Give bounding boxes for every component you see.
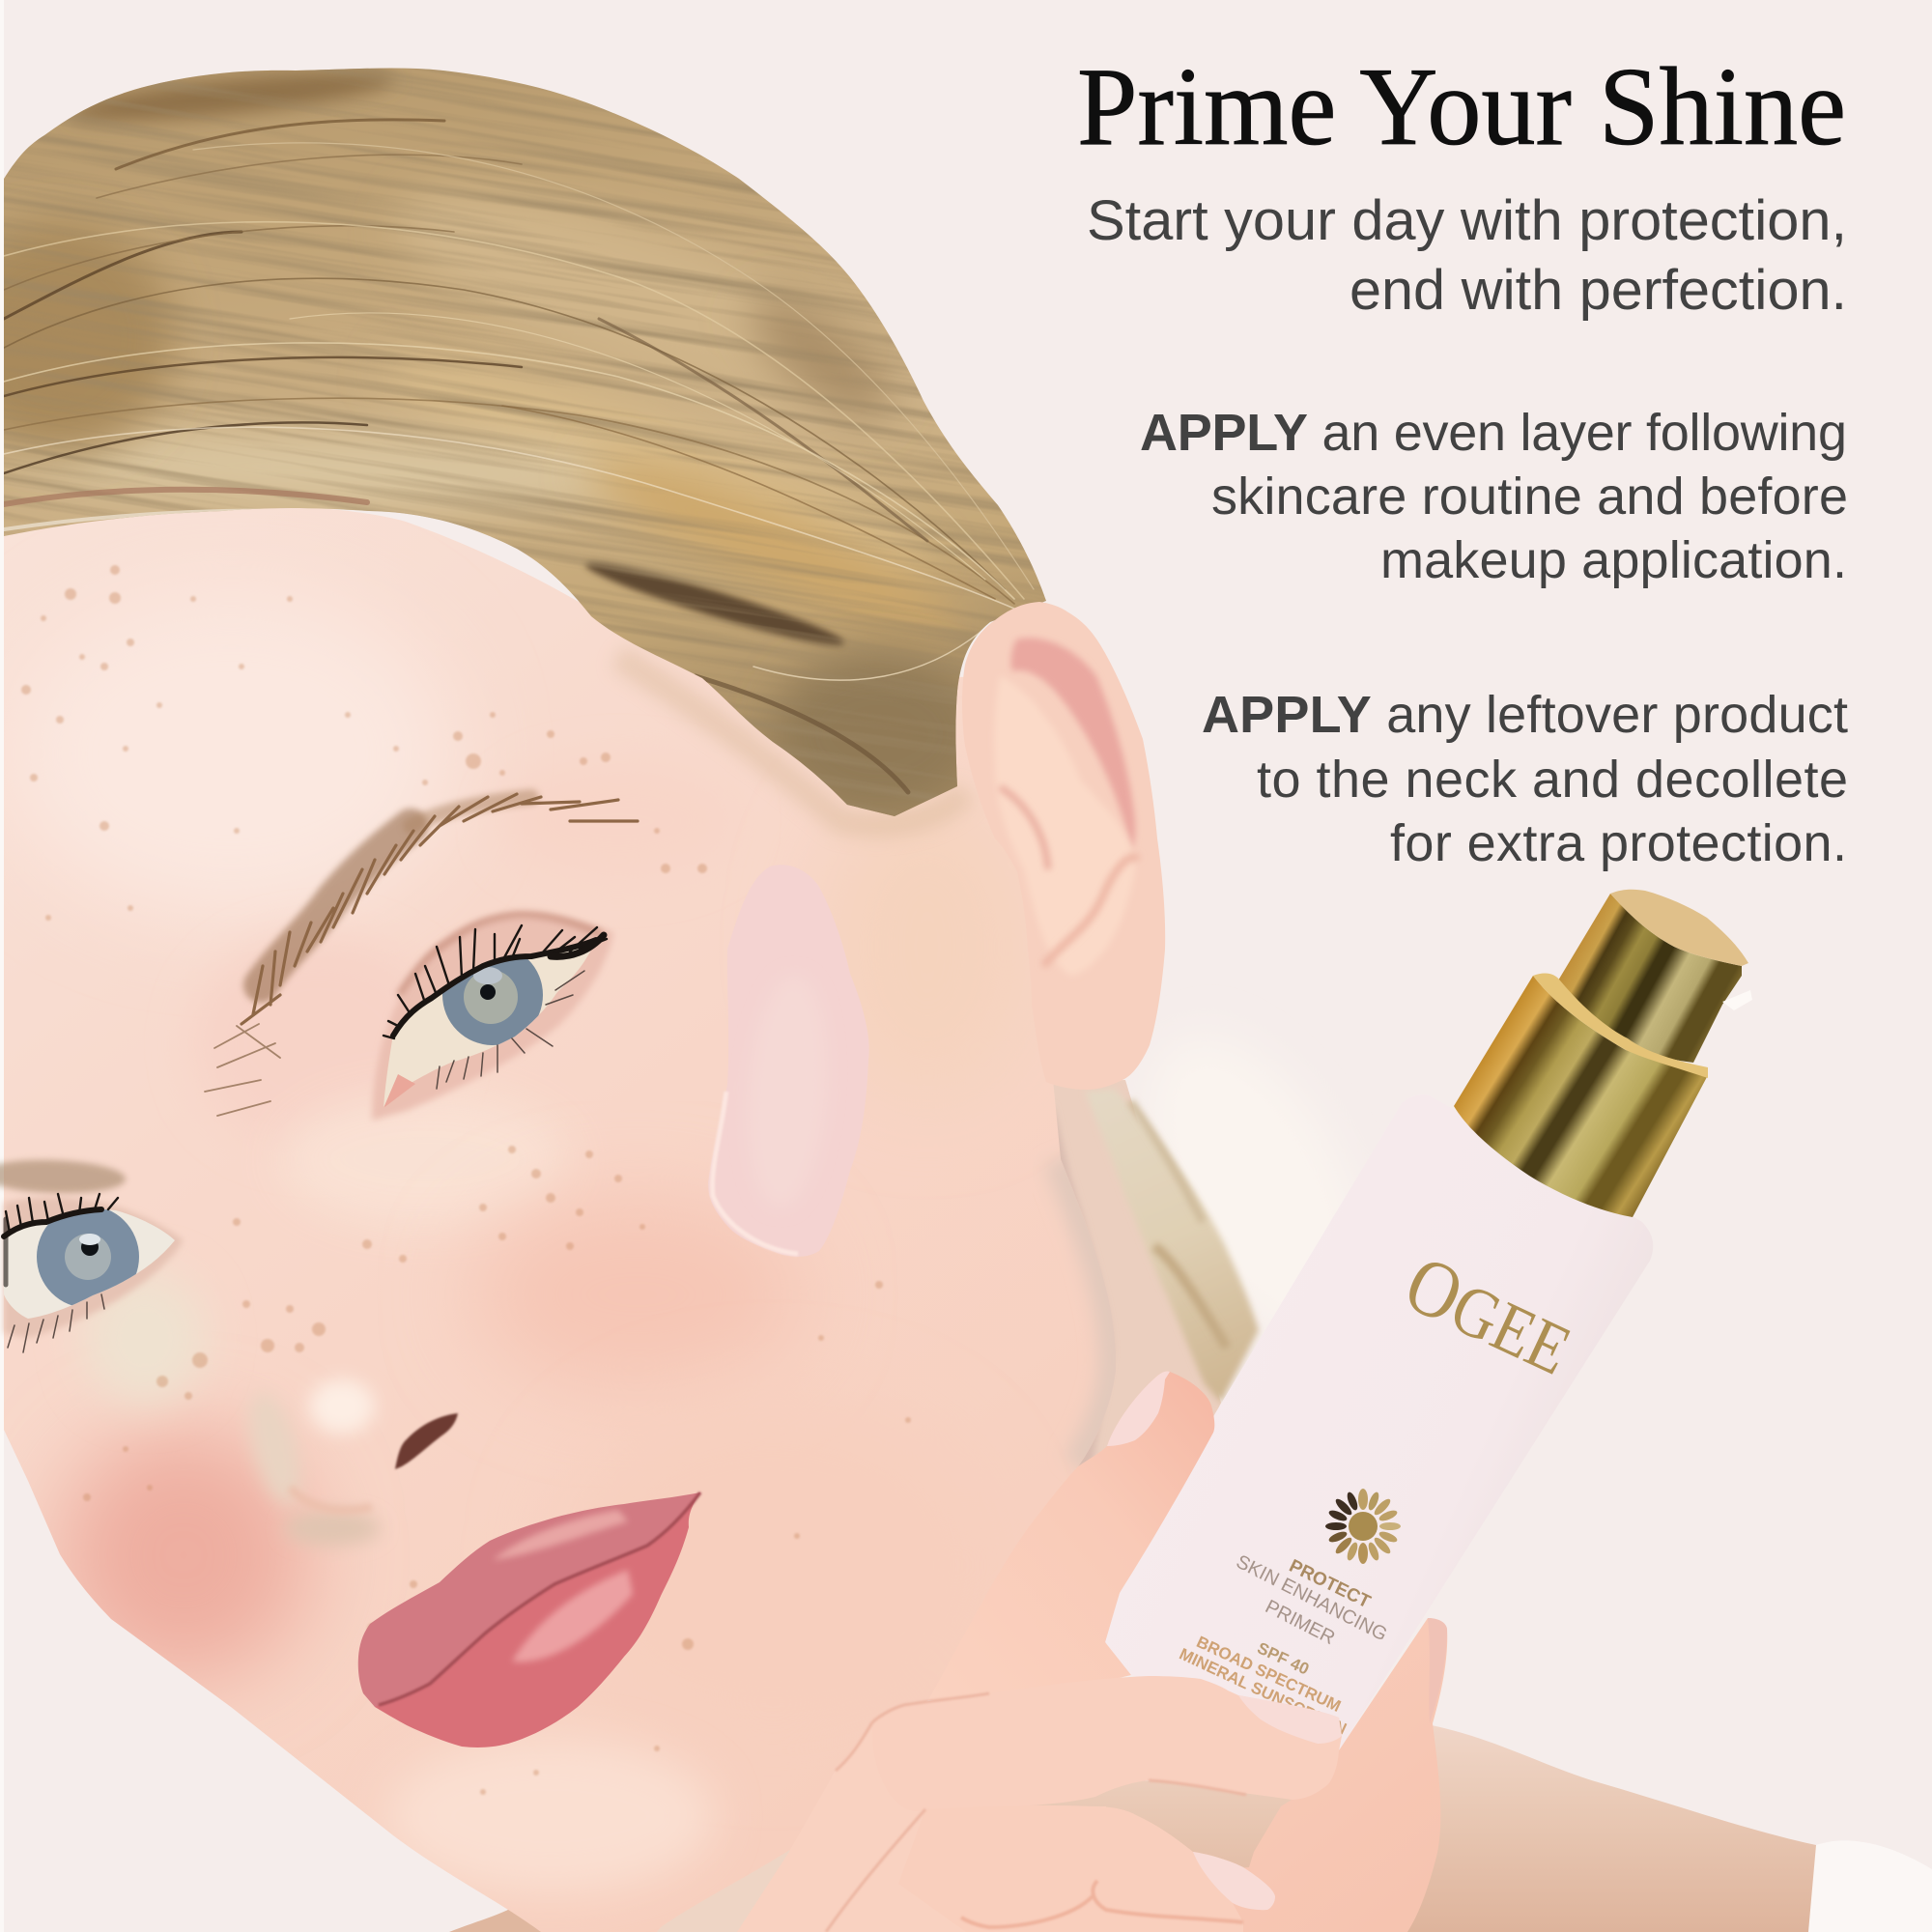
bottle label text: SPF 40 — [1255, 1638, 1312, 1679]
chest sliver under chin — [449, 1908, 551, 1932]
cream swatch — [708, 865, 869, 1257]
left light edge — [0, 0, 4, 1932]
freckles — [21, 565, 911, 1795]
right eye — [372, 915, 613, 1121]
step 1 text: APPLY an even layer following — [1140, 404, 1847, 462]
fine hair texture — [4, 68, 1041, 800]
nostril — [395, 1413, 458, 1469]
eye socket — [4, 1197, 184, 1338]
index finger — [928, 1371, 1214, 1705]
step 2 text: APPLY any leftover product — [1202, 686, 1848, 744]
collar rim — [1533, 974, 1708, 1078]
bottle label text — [1177, 1551, 1390, 1738]
bottle body — [1105, 1094, 1653, 1750]
ear — [962, 602, 1165, 1090]
bottle label text: PRIMER — [1262, 1596, 1338, 1649]
middle finger — [872, 1676, 1342, 1811]
bottle label text: MINERAL SUNSCREEN — [1177, 1645, 1350, 1738]
bottle label text: BROAD SPECTRUM — [1194, 1633, 1344, 1716]
finger seams — [826, 1693, 1246, 1932]
step 2 text: for extra protection. — [1390, 814, 1847, 872]
subtitle: end with perfection. — [1350, 259, 1847, 322]
subtitle: Start your day with protection, — [1087, 189, 1847, 252]
hair — [4, 68, 1046, 816]
top of the pump — [1610, 890, 1748, 966]
pale glow behind ponytail — [1102, 1003, 1409, 1374]
ring fingernail — [1193, 1852, 1275, 1910]
step 2 text: to the neck and decollete — [1257, 751, 1848, 809]
lip highlights — [493, 1510, 628, 1560]
step 1 text: skincare routine and before — [1211, 468, 1848, 526]
neck shadow strip — [1005, 1104, 1113, 1468]
step 1 text: makeup application. — [1380, 531, 1847, 589]
logo: OGEE — [1392, 1238, 1586, 1392]
eye socket — [372, 916, 613, 1121]
index fingernail — [1107, 1371, 1170, 1446]
left eyebrow — [0, 1157, 127, 1196]
face — [4, 505, 1116, 1932]
lashes — [384, 925, 607, 1089]
iris — [442, 959, 543, 1045]
middle fingernail — [1238, 1695, 1342, 1744]
light wedge under the chin — [647, 1835, 802, 1932]
iris — [37, 1206, 139, 1308]
hair tone shading — [402, 195, 744, 344]
nose — [290, 1379, 458, 1510]
upper lip — [358, 1492, 700, 1707]
bottle label text: SKIN ENHANCING — [1233, 1551, 1390, 1646]
left eye — [0, 1194, 184, 1352]
subtitle — [1087, 189, 1847, 322]
lower hand — [737, 1722, 1106, 1932]
ponytail — [1085, 1089, 1259, 1403]
nozzle — [1722, 990, 1752, 1010]
lower lip — [375, 1492, 700, 1747]
sun emblem — [1325, 1489, 1401, 1564]
title: Prime Your Shine — [1077, 45, 1846, 169]
skin tone shading — [10, 589, 1116, 1893]
step 1 text — [1140, 404, 1848, 589]
dark and light strands — [4, 120, 1034, 792]
step 2 text — [1202, 686, 1848, 872]
neck behind the jaw — [966, 1080, 1221, 1700]
white sleeve — [1808, 1840, 1932, 1932]
right eyebrow — [205, 794, 638, 1116]
hand — [737, 1371, 1342, 1932]
thumb nail — [1428, 1618, 1447, 1723]
bottle label text: PROTECT — [1286, 1556, 1374, 1613]
ring finger — [898, 1805, 1275, 1932]
shoulder and arm behind the hand — [676, 1723, 1816, 1932]
under ring finger shading — [961, 1881, 1243, 1927]
gold pump body — [1558, 894, 1742, 1063]
gold collar — [1454, 976, 1708, 1217]
hand: thumb behind the bottle — [1063, 1618, 1447, 1932]
lashes — [4, 1194, 118, 1352]
bottle — [1105, 890, 1752, 1750]
lips — [358, 1492, 700, 1747]
